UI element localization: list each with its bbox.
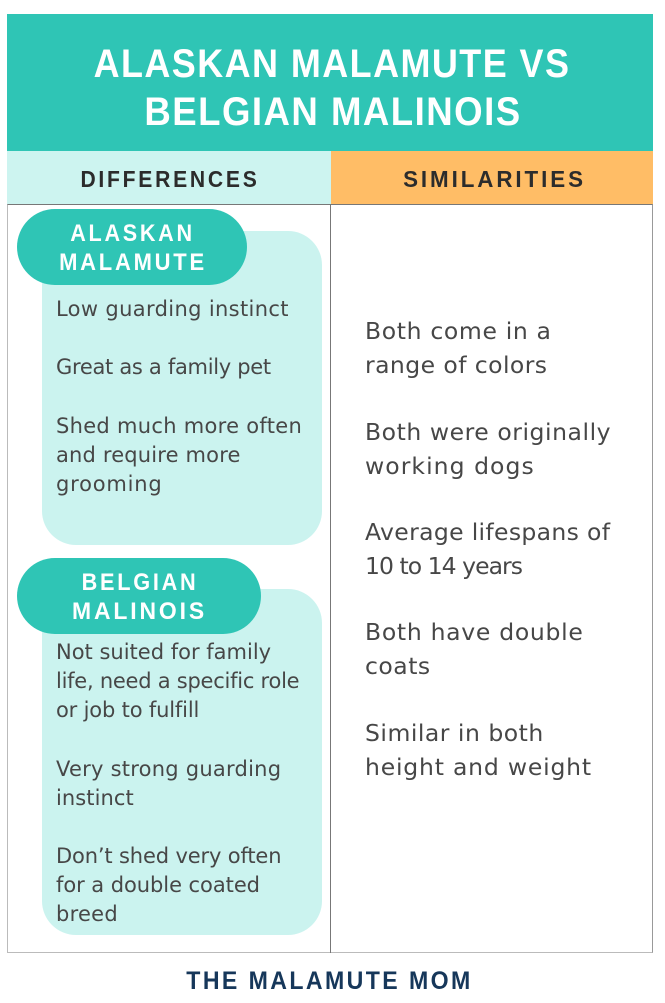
badge: alaskan malamute: ALASKAN [70, 220, 195, 247]
badge: alaskan malamute [17, 209, 247, 285]
text: malinois differences: instinct [56, 786, 134, 810]
text: similarities list [365, 317, 611, 780]
text: malinois differences: Not suited for family [56, 640, 271, 664]
text: malamute differences: Shed much more often [56, 414, 302, 438]
text: malinois differences: or job to fulfill [56, 698, 199, 722]
text: similarities list: Both have double [365, 618, 584, 646]
text: similarities list: coats [365, 652, 431, 680]
text: malinois differences: Don’t shed very often [56, 844, 281, 868]
text: malamute differences: Low guarding instinct [56, 297, 289, 321]
text: similarities list: Both were originally [365, 418, 611, 446]
table frame [7, 204, 653, 953]
text: malamute differences: grooming [56, 472, 162, 496]
similarities header [331, 151, 653, 204]
badge: belgian malinois: BELGIAN [82, 569, 198, 596]
text: malamute differences: and require more [56, 443, 241, 467]
text: similarities list: Similar in both [365, 719, 544, 747]
text: malinois differences: for a double coated [56, 873, 260, 897]
panel: alaskan malamute [42, 231, 322, 545]
text: similarities list: working dogs [365, 452, 535, 480]
text: similarities list: height and weight [365, 752, 592, 780]
badge: belgian malinois [17, 558, 261, 634]
similarities header: SIMILARITIES [403, 166, 586, 192]
text: similarities list: Average lifespans of [365, 518, 610, 546]
title banner [7, 14, 653, 151]
differences header [7, 151, 331, 204]
text: malinois differences: life, need a specific role [56, 669, 299, 693]
panel: belgian malinois [42, 589, 322, 935]
column divider [330, 204, 331, 953]
text: similarities list: range of colors [365, 350, 547, 378]
badge: belgian malinois: MALINOIS [72, 598, 207, 625]
text: malinois differences [56, 640, 299, 926]
text: malamute differences: Great as a family pet [56, 355, 271, 379]
text: malinois differences: breed [56, 902, 118, 926]
differences header: DIFFERENCES [80, 166, 260, 192]
text: similarities list: Both come in a [365, 317, 552, 345]
text: similarities list: 10 to 14 years [365, 552, 522, 580]
text: malinois differences: Very strong guarding [56, 757, 281, 781]
text: malamute differences [56, 297, 302, 496]
title banner: BELGIAN MALINOIS [144, 90, 522, 134]
footer brand: THE MALAMUTE MOM [186, 967, 473, 995]
badge: alaskan malamute: MALAMUTE [59, 249, 207, 276]
title banner: ALASKAN MALAMUTE VS [94, 42, 570, 86]
